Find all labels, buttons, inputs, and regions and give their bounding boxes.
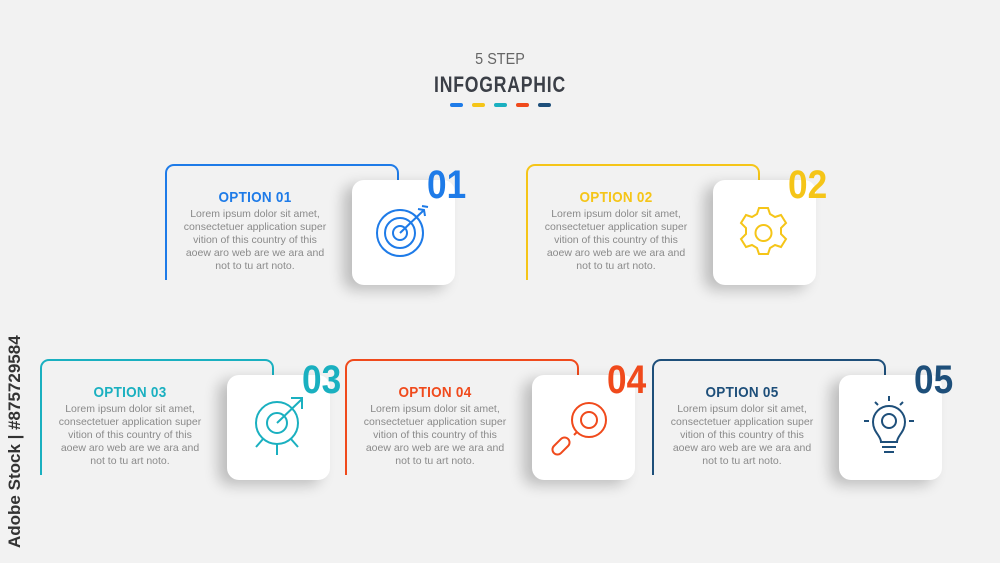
text 04: not to tu art noto. [395,455,475,467]
icon box: target [352,180,455,285]
text 03: consectetuer application super [59,416,201,428]
text 02: aoew aro web are we ara and [547,247,685,259]
text 03: Lorem ipsum dolor sit amet, [65,403,195,415]
text 01: Lorem ipsum dolor sit amet, [190,208,320,220]
header color dashes [450,103,551,107]
text 04 [364,403,506,467]
text 02 [545,208,688,272]
text 01 [184,208,326,272]
text 05: Lorem ipsum dolor sit amet, [677,403,807,415]
text 05: consectetuer application super [671,416,813,428]
icon box: magnifier [532,375,635,480]
icon box: light bulb [839,375,942,480]
text 03: vition of this country of this [68,429,192,441]
text 05: aoew aro web are we ara and [673,442,811,454]
title 03: OPTION 03 [94,384,166,401]
text 02: Lorem ipsum dolor sit amet, [551,208,681,220]
text 04: Lorem ipsum dolor sit amet, [370,403,500,415]
number 02: 02 [788,163,827,207]
title 04: OPTION 04 [399,384,471,401]
card 01 [165,163,466,297]
text 03 [59,403,202,467]
watermark side text: Adobe Stock | #875729584 [5,335,24,548]
text 05: vition of this country of this [680,429,804,441]
text 04: aoew aro web are we ara and [366,442,504,454]
text 01: aoew aro web are we ara and [186,247,324,259]
text 04: vition of this country of this [373,429,497,441]
text 01: consectetuer application super [184,221,326,233]
text 05 [671,403,814,467]
number 01: 01 [427,163,466,207]
text 03: not to tu art noto. [90,455,170,467]
header: 5 STEP [475,51,525,68]
header [434,51,566,97]
text 01: not to tu art noto. [215,260,295,272]
card 03 [40,358,341,492]
text 02: vition of this country of this [554,234,678,246]
title 05: OPTION 05 [706,384,778,401]
text 05: not to tu art noto. [702,455,782,467]
title 02: OPTION 02 [580,189,652,206]
card 02 [526,163,827,297]
header: INFOGRAPHIC [434,72,566,97]
number 04: 04 [607,358,646,402]
number 05: 05 [914,358,953,402]
title 01: OPTION 01 [219,189,291,206]
text 02: consectetuer application super [545,221,687,233]
icon box: gear [713,180,816,285]
card 04 [345,358,646,492]
number 03: 03 [302,358,341,402]
text 04: consectetuer application super [364,416,506,428]
text 01: vition of this country of this [193,234,317,246]
text 03: aoew aro web are we ara and [61,442,199,454]
icon box: target with arrow [227,375,330,480]
card 05 [652,358,953,492]
text 02: not to tu art noto. [576,260,656,272]
